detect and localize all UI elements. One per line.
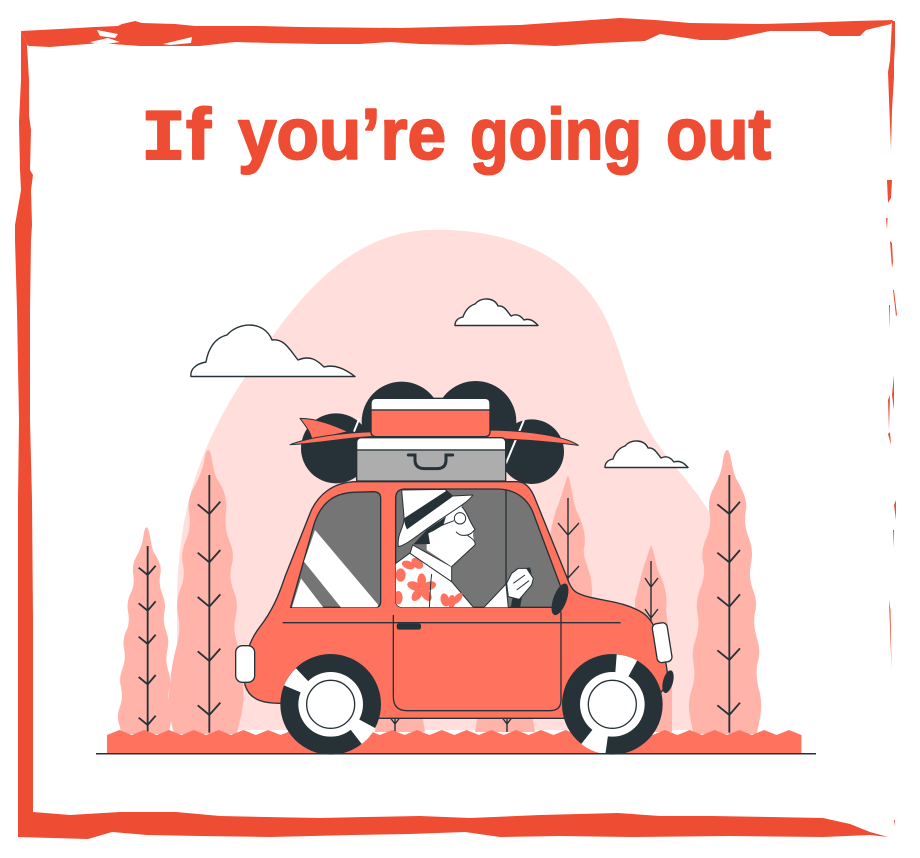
door lines [283, 612, 621, 711]
shirt [395, 552, 474, 608]
hat [398, 489, 473, 547]
smile [456, 532, 467, 535]
trees under car [375, 680, 672, 732]
front wheel [562, 654, 663, 755]
ground [107, 730, 801, 754]
flower centre [407, 573, 436, 601]
headlight [652, 622, 673, 663]
title: you’re [238, 95, 446, 175]
tree stems [139, 475, 740, 733]
ground line [96, 753, 816, 754]
surfboard [290, 418, 578, 445]
arm [483, 584, 508, 608]
window stripes [292, 530, 378, 608]
side mirror [548, 581, 572, 617]
title: going [470, 95, 642, 175]
clouds [191, 299, 688, 468]
front window [396, 489, 561, 607]
top suitcase [371, 398, 490, 437]
illustration background blob [177, 230, 745, 730]
straps [354, 418, 524, 463]
trees left [118, 450, 243, 734]
bumper [660, 669, 676, 694]
cloud left [191, 325, 355, 376]
glasses [440, 521, 454, 526]
face [427, 506, 475, 567]
rear window [291, 492, 381, 607]
door handle [397, 623, 421, 630]
neck and collar [410, 545, 452, 582]
title: If [141, 95, 212, 181]
title [141, 95, 771, 181]
tree far left [118, 527, 171, 734]
hand [507, 568, 533, 599]
car and luggage [236, 381, 676, 755]
rear wheel [280, 654, 381, 755]
tail light [236, 646, 255, 682]
small tree behind car [635, 545, 670, 660]
tree right [689, 450, 761, 734]
tree behind car [375, 475, 672, 732]
tree left [168, 450, 243, 734]
title: out [666, 95, 771, 175]
bottom suitcase [357, 438, 506, 481]
hair [413, 517, 446, 544]
car body [244, 482, 667, 718]
cloud right [605, 441, 688, 468]
spare tyres [301, 381, 564, 484]
driver [394, 489, 533, 609]
cloud top right [455, 299, 538, 326]
steering [511, 567, 532, 608]
